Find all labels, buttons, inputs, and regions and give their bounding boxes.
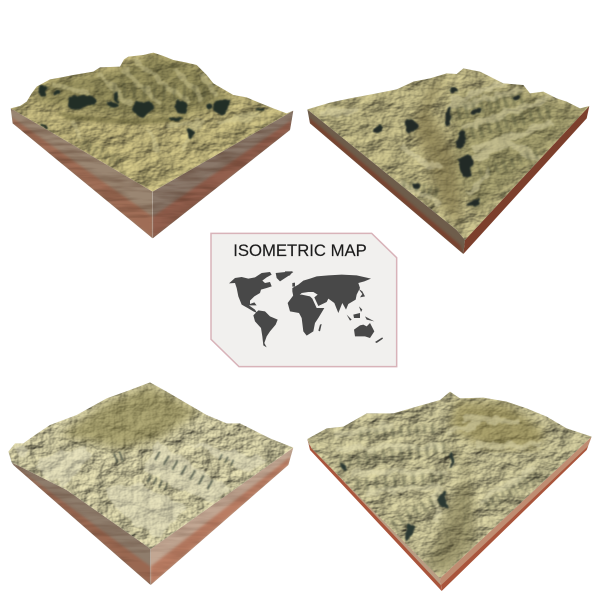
right soil face: [462, 103, 592, 257]
right soil face: [151, 445, 294, 587]
Greenland: [276, 271, 293, 281]
map card: [211, 233, 397, 367]
Africa: [288, 295, 324, 336]
dark gully shadows: [340, 454, 453, 540]
mountain shading: [33, 53, 233, 118]
textured top surface: [305, 390, 593, 580]
dark shadow hollows: [38, 84, 264, 137]
Australia: [354, 323, 374, 338]
textured top surface: [7, 50, 297, 193]
plateau shading: [450, 402, 545, 448]
terrain block: top right: [305, 67, 592, 257]
pale ridges: [50, 60, 260, 150]
terrain block: top left: [7, 50, 297, 240]
pale ridge crests: [333, 418, 540, 522]
title: ISOMETRIC MAP: [233, 241, 367, 260]
ridge shading: [450, 90, 587, 213]
pale rock highlights: [13, 442, 267, 538]
dark gully streaks: [115, 455, 233, 488]
South America: [253, 310, 278, 347]
Eurasia: [292, 275, 371, 313]
ridge gully streaks: [403, 97, 553, 193]
card panel: [211, 233, 397, 367]
central valley: [413, 75, 460, 227]
right soil face: [438, 435, 593, 592]
world map: Americas: [229, 271, 293, 347]
left soil face: [10, 458, 152, 587]
upper slope shading: [60, 385, 200, 448]
pale ridge crests: [320, 83, 553, 203]
dark shadow hollows: [372, 87, 521, 206]
terrain block: bottom left: [7, 380, 295, 587]
valley shading: [427, 428, 473, 575]
right soil face: [153, 108, 294, 240]
left soil face: [305, 437, 443, 593]
textured top surface: [7, 380, 295, 552]
ridge gully streaks: [340, 428, 540, 525]
North America: [229, 272, 272, 313]
textured top surface: [305, 67, 592, 242]
terrain block: bottom right: [305, 390, 593, 593]
valley band: [57, 112, 187, 125]
left soil face: [7, 107, 153, 240]
gully streaks: [83, 90, 213, 163]
islands: [285, 271, 383, 343]
world map: Old World: [285, 271, 383, 343]
left soil face: [305, 107, 467, 257]
